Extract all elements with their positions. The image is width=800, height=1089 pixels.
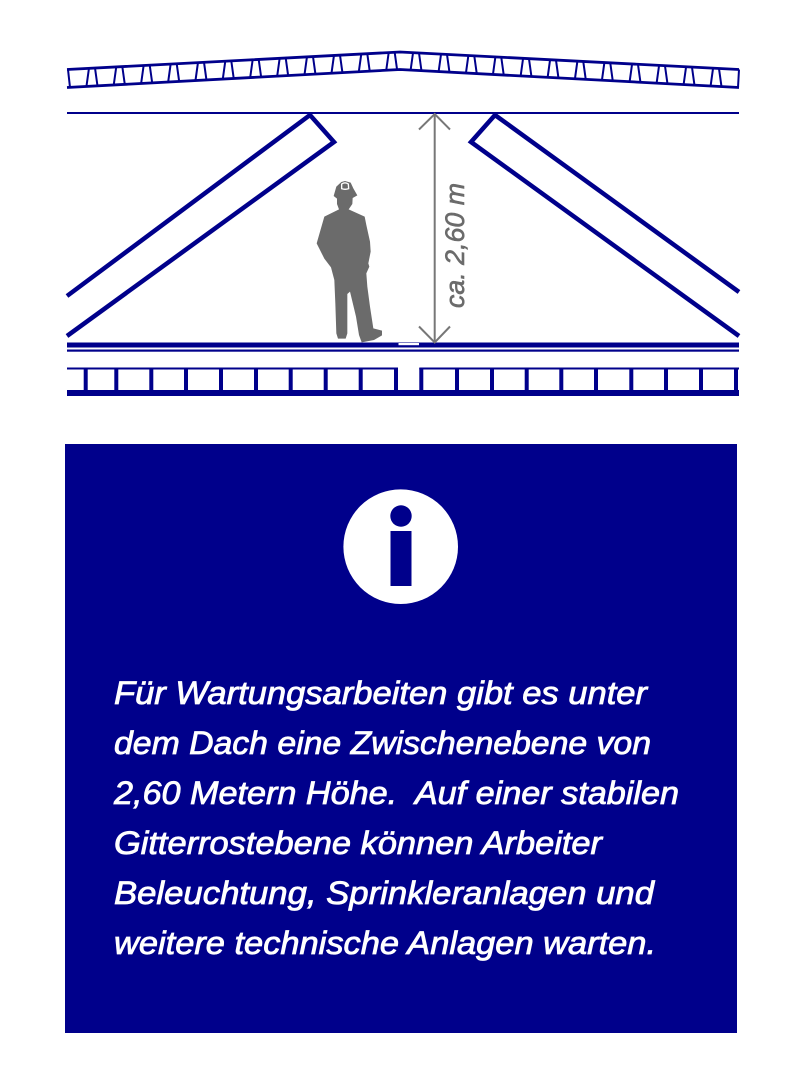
info text block: 2,60 Metern Höhe. Auf einer stabilen [113, 775, 679, 811]
grating walkway [67, 368, 739, 396]
right diagonal beam [471, 115, 739, 336]
height label: ca. 2,60 m [440, 183, 470, 308]
info text block: dem Dach eine Zwischenebene von [114, 725, 651, 761]
info text block: Gitterrostebene können Arbeiter [114, 825, 603, 861]
info text block: weitere technische Anlagen warten. [114, 925, 656, 961]
info text block: Für Wartungsarbeiten gibt es unter [114, 675, 648, 711]
floor platform [67, 342, 739, 352]
left diagonal beam [67, 115, 334, 336]
ceiling line [67, 112, 739, 114]
info text block [113, 675, 679, 961]
panel: info box [65, 444, 737, 1033]
icon: worker silhouette [317, 181, 382, 342]
height arrow [419, 114, 450, 343]
roof truss [67, 52, 739, 88]
info text block: Beleuchtung, Sprinkleranlagen und [114, 875, 655, 911]
panel background [65, 444, 737, 1033]
icon: information [343, 489, 458, 604]
